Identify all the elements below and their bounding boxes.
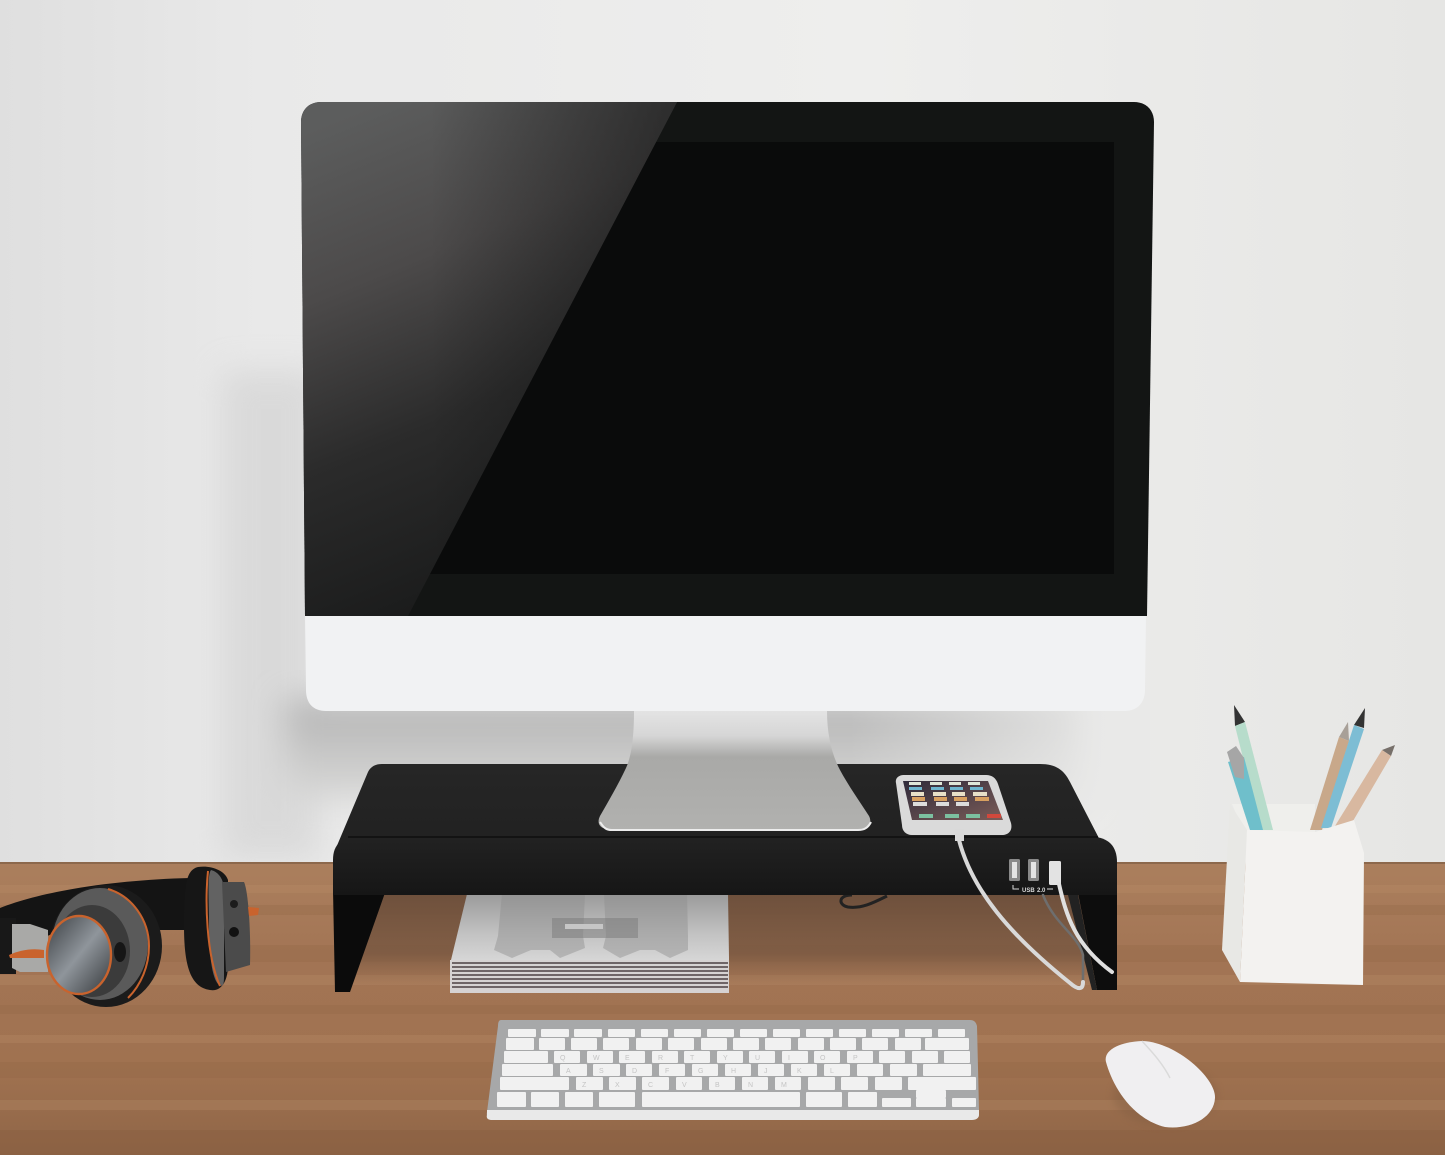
power cable behind riser xyxy=(841,895,887,907)
function row xyxy=(508,1029,536,1037)
tan pencil xyxy=(1382,745,1395,756)
wall background xyxy=(0,0,1445,864)
wooden desk xyxy=(0,862,1445,1155)
right ear cup xyxy=(184,867,228,990)
keyboard keys xyxy=(497,1029,976,1107)
silver chin xyxy=(305,616,1146,711)
pencil holder with pencils xyxy=(1222,705,1395,985)
cover artwork xyxy=(494,894,688,958)
book cover xyxy=(451,894,729,960)
headband xyxy=(0,878,190,972)
USB label: USB xyxy=(1022,888,1035,894)
mouse xyxy=(1106,1041,1217,1127)
app icons xyxy=(909,782,1001,818)
left ear cap xyxy=(47,916,111,994)
monitor xyxy=(301,102,1154,711)
holder left side xyxy=(1222,804,1247,982)
holder inside back wall xyxy=(1232,804,1315,835)
blue pencil xyxy=(1321,708,1365,828)
USB ports and label: 2.0 xyxy=(1037,888,1046,894)
shift row xyxy=(500,1077,569,1090)
holder front face xyxy=(1240,820,1364,985)
riser front face xyxy=(333,837,1117,895)
left band end xyxy=(0,918,16,974)
riser right leg xyxy=(1078,893,1117,990)
monitor shadow on wall xyxy=(222,370,320,860)
shadow fade to the right xyxy=(850,690,1150,810)
bottom row xyxy=(497,1092,526,1107)
key legends: QWERTYUIOP xyxy=(560,1055,858,1062)
monitor riser xyxy=(333,764,1117,992)
monitor body xyxy=(301,102,1154,616)
charging cables xyxy=(955,829,1112,988)
riser shadow on desk xyxy=(345,894,1090,986)
orange strap tip xyxy=(248,907,259,916)
QWERTY row xyxy=(504,1051,548,1063)
USB ports and label xyxy=(1009,859,1061,894)
key legends xyxy=(560,1055,858,1089)
riser top surface xyxy=(336,764,1104,848)
key legends: ASDFGHJKL xyxy=(566,1068,834,1075)
keyboard xyxy=(487,1020,979,1120)
mint pencil xyxy=(1234,705,1273,830)
headphones xyxy=(0,867,259,1007)
book under riser xyxy=(450,894,729,993)
monitor stand xyxy=(599,711,871,830)
book pages xyxy=(450,960,729,993)
shadow below monitor xyxy=(285,700,1085,800)
orange strap xyxy=(9,949,44,958)
display panel xyxy=(347,142,1114,574)
screen glare xyxy=(301,102,677,616)
number row xyxy=(506,1038,534,1050)
wood pencil xyxy=(1339,722,1349,741)
home row xyxy=(502,1064,553,1076)
hinge xyxy=(12,924,48,972)
riser left leg xyxy=(333,890,386,992)
glare fade xyxy=(408,102,677,616)
phone on riser xyxy=(896,775,1011,835)
blue box cutter xyxy=(1227,746,1263,830)
key legends: ZXCVBNM xyxy=(582,1082,787,1089)
left ear cup xyxy=(50,885,162,1007)
